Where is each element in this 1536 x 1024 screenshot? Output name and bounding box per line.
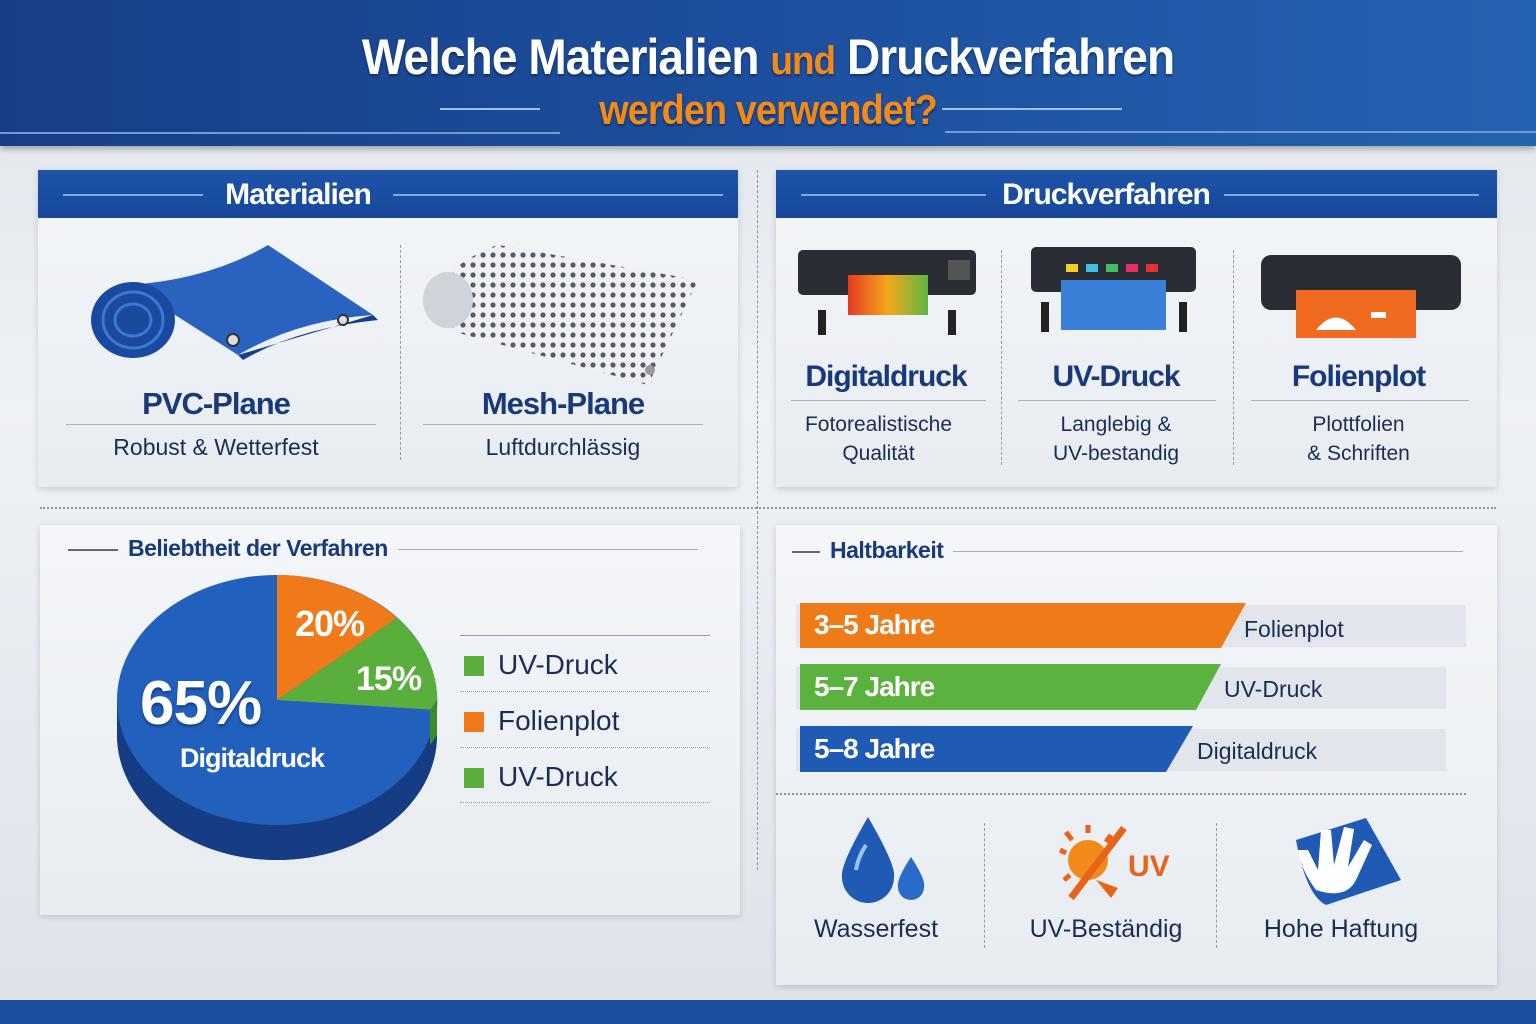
- panel: Druckverfahren: & Schriften: [1307, 442, 1410, 465]
- label: Digitaldruck: Digitaldruck: [805, 360, 967, 393]
- heading: Materialien: [38, 170, 738, 218]
- legend: UV-Druck: [498, 649, 618, 680]
- panel: Beliebtheit pie chart: 65%: [140, 669, 261, 738]
- panel: Haltbarkeit: 5–8 Jahre: [814, 733, 934, 764]
- legend: UV-Druck: [498, 761, 618, 792]
- icon: UV sun: [1058, 825, 1170, 900]
- label: UV-Druck: UV-Druck: [1052, 360, 1180, 393]
- icon: printer UV: [1031, 247, 1196, 332]
- panel: Druckverfahren: Langlebig &: [1061, 413, 1171, 436]
- label: UV-Beständig: UV-Beständig: [1030, 915, 1182, 943]
- icon: PVC roll: [91, 245, 378, 360]
- heading: Materialien: Materialien: [225, 178, 371, 211]
- heading: Druckverfahren: [776, 170, 1497, 218]
- legend: Folienplot: [498, 705, 619, 736]
- panel: Beliebtheit pie chart: [40, 525, 740, 915]
- title: Welche Materialien und Druckverfahren: [362, 29, 1174, 85]
- label: Wasserfest: Wasserfest: [814, 915, 938, 943]
- icon: printer digital: [798, 250, 976, 335]
- icon: water drops: [842, 817, 924, 903]
- header band: [0, 0, 1536, 146]
- panel: Beliebtheit pie chart: 15%: [356, 660, 421, 698]
- panel: Druckverfahren: Qualität: [842, 442, 915, 465]
- heading: Druckverfahren: Druckverfahren: [1002, 178, 1210, 211]
- label: Mesh-Plane: Mesh-Plane: [482, 386, 644, 421]
- panel: Druckverfahren: Plottfolien: [1312, 413, 1405, 436]
- label: Folienplot: Folienplot: [1292, 360, 1425, 393]
- icon: adhesive hand: [1296, 818, 1401, 905]
- panel: Haltbarkeit: [776, 525, 1497, 985]
- bottom band: [0, 1000, 1536, 1024]
- panel: Druckverfahren: Fotorealistische: [805, 413, 952, 436]
- subtitle: werden verwendet?: [599, 86, 937, 133]
- panel: Haltbarkeit: Folienplot: [1244, 616, 1344, 642]
- panel: Haltbarkeit: Digitaldruck: [1197, 738, 1317, 764]
- legend: [460, 635, 710, 803]
- icon: mesh sheet: [423, 245, 696, 384]
- heading: Haltbarkeit: Haltbarkeit: [830, 537, 943, 563]
- panel: Materialien: Luftdurchlässig: [486, 434, 640, 460]
- label: Hohe Haftung: Hohe Haftung: [1264, 915, 1418, 943]
- icon: plotter: [1261, 255, 1461, 338]
- panel: Beliebtheit pie chart: Digitaldruck: [180, 743, 324, 773]
- panel: Druckverfahren: UV-bestandig: [1053, 442, 1179, 465]
- bar chart: [796, 603, 1466, 772]
- panel: Haltbarkeit: 3–5 Jahre: [814, 609, 934, 640]
- panel: Materialien: Robust & Wetterfest: [113, 434, 319, 460]
- panel: Haltbarkeit: 5–7 Jahre: [814, 671, 934, 702]
- pie chart: [117, 575, 438, 860]
- label: PVC-Plane: PVC-Plane: [142, 386, 290, 421]
- icon: UV sun: UV: [1128, 850, 1170, 883]
- heading: Beliebtheit: Beliebtheit der Verfahren: [128, 535, 388, 561]
- panel: Materialien: [38, 170, 738, 487]
- panel: Druckverfahren: [776, 170, 1497, 487]
- panel: Haltbarkeit: UV-Druck: [1224, 676, 1322, 702]
- pie labels: 20%: [295, 603, 364, 644]
